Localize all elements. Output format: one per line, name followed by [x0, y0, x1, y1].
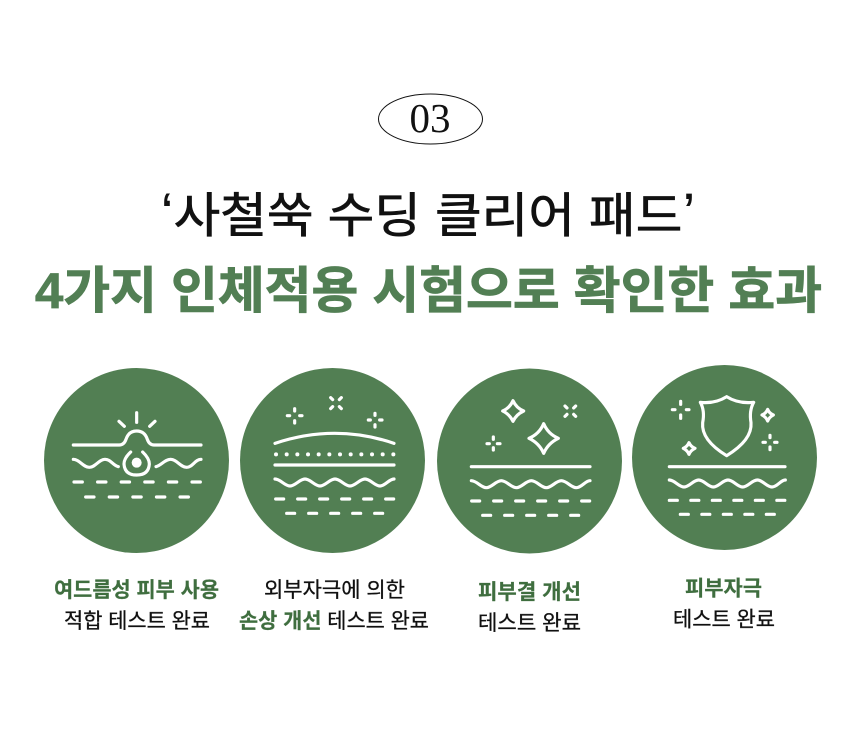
label 2: 외부자극에 의한: [264, 579, 405, 602]
label 3: [478, 581, 581, 635]
label 2: [239, 579, 429, 633]
panel: skin irritation: [632, 365, 817, 550]
panel: damage improvement: [240, 368, 425, 553]
label 4: [673, 578, 775, 632]
label 1: [54, 579, 219, 633]
circle 1: [44, 368, 229, 553]
label 2: 손상 개선 테스트 완료: [239, 610, 429, 633]
title line 1: ‘사철쑥 수딩 클리어 패드 ’: [160, 181, 696, 244]
label 3: 피부결 개선: [478, 581, 581, 604]
label 3: 테스트 완료: [478, 612, 581, 635]
label 4: 피부자극: [685, 578, 762, 600]
section number badge: 03: [410, 95, 450, 141]
title line 2: 4가지 인체적용 시험으로 확인한 효과: [35, 263, 822, 319]
circle 3: [437, 368, 622, 554]
icon: skin barrier layers: [275, 398, 395, 513]
label 4: 테스트 완료: [673, 608, 775, 632]
circle 4: [632, 365, 817, 550]
icon: pimple on skin: [73, 413, 202, 497]
panel: acne skin: [44, 368, 229, 553]
label 1: 여드름성 피부 사용: [54, 579, 219, 602]
section number badge: [378, 94, 482, 144]
icon: sparkling smooth skin: [471, 401, 591, 515]
circle 2: [240, 368, 425, 553]
label 1: 적합 테스트 완료: [64, 610, 210, 633]
icon: shield on skin: [669, 397, 786, 514]
panel: skin texture: [437, 368, 622, 554]
